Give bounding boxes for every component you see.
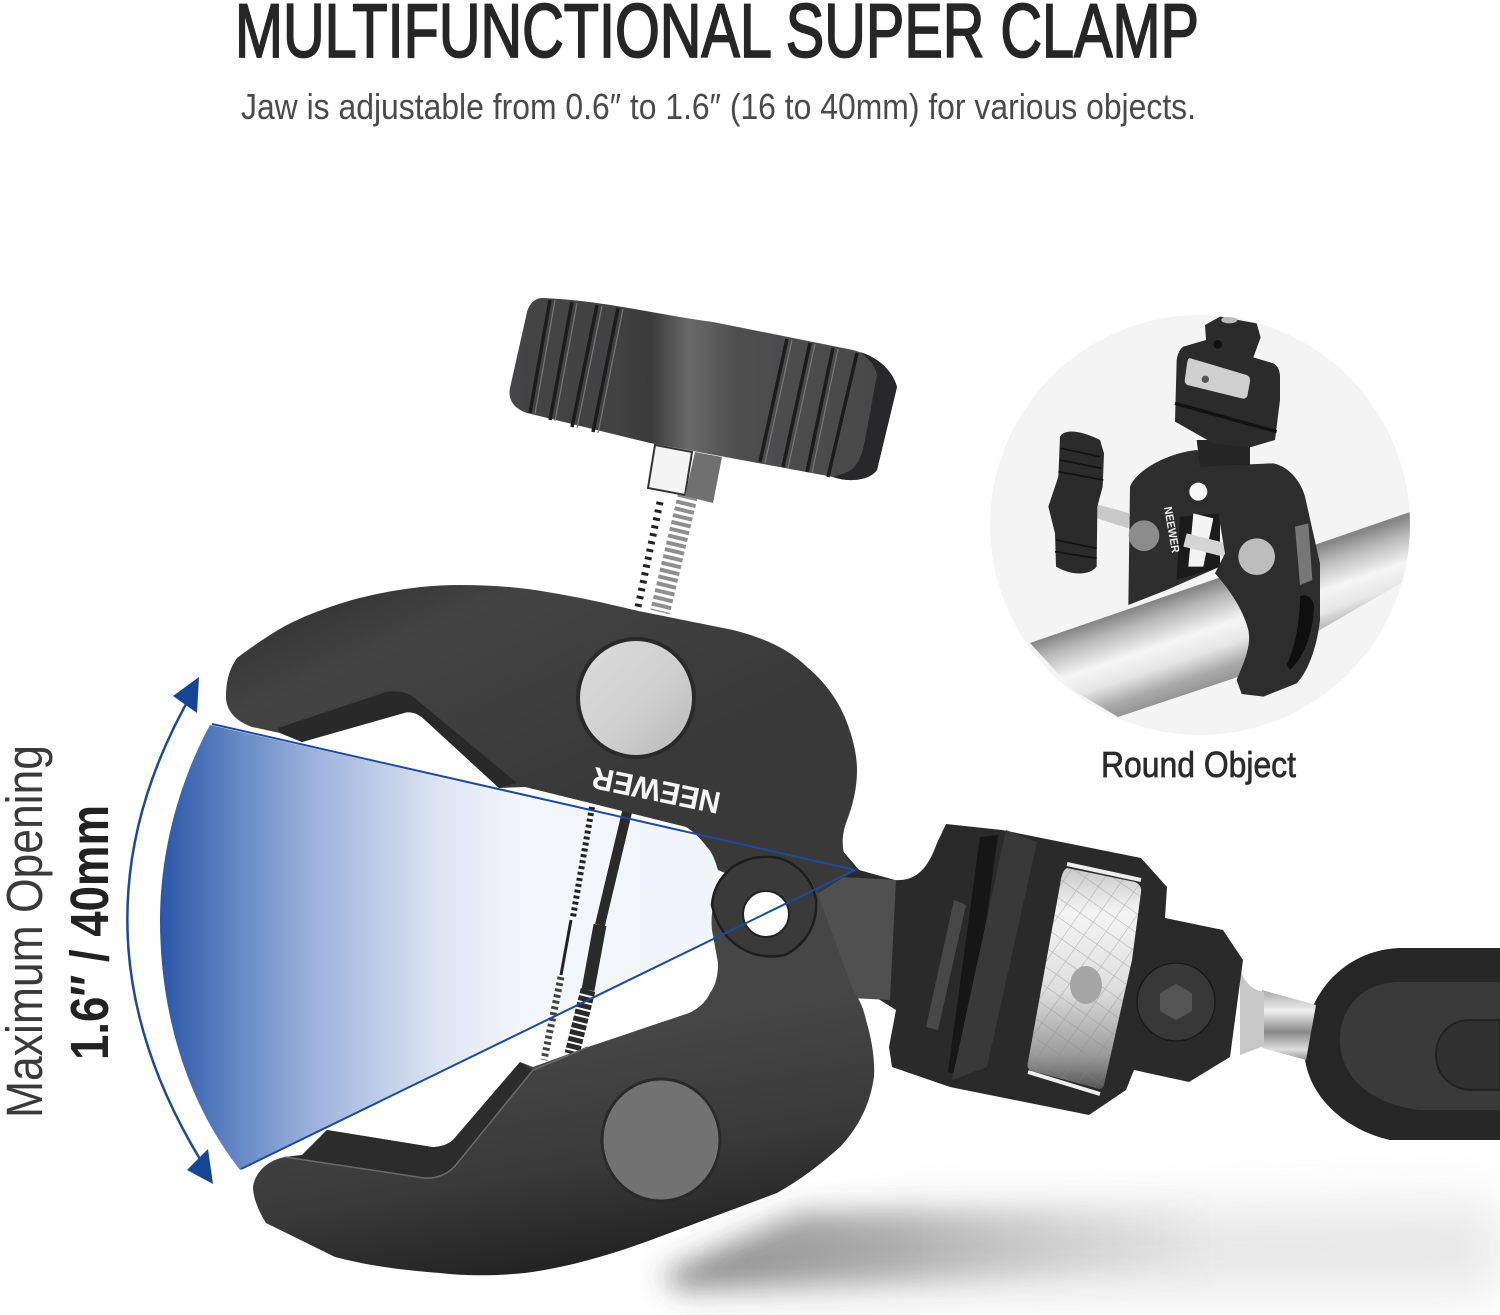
metal shaft <box>1262 990 1316 1060</box>
lower jaw pad <box>285 1062 533 1177</box>
inset background circle <box>990 315 1410 735</box>
collar <box>648 445 692 495</box>
screw inside opening <box>544 807 627 1060</box>
arm body <box>1304 948 1500 1140</box>
pivot ring <box>712 857 816 957</box>
brand logo: NEEWER <box>589 760 723 820</box>
inset clamp on tube: NEEWER <box>1161 506 1181 554</box>
wedge edge lines <box>212 724 855 1169</box>
clamp jaws <box>226 585 874 1275</box>
opening angle wedge fill <box>160 725 720 1170</box>
double arrow arc <box>127 677 213 1184</box>
ball arm <box>1240 948 1500 1140</box>
knurled ring <box>1028 864 1141 1094</box>
inset panel: round object <box>990 315 1410 735</box>
inset clamp on tube <box>1030 317 1410 717</box>
knob ridges <box>530 300 857 477</box>
clamp mount block <box>805 824 1243 1115</box>
lower jaw <box>253 857 874 1275</box>
thumb screw <box>510 298 897 612</box>
pivot hole <box>743 891 789 937</box>
knob <box>510 298 897 480</box>
upper screw head <box>578 639 694 757</box>
hex bolt <box>1137 963 1215 1041</box>
lower screw head <box>602 1079 720 1201</box>
ground shadow <box>660 1205 1500 1290</box>
inset caption: Round Object <box>1101 744 1296 785</box>
mount neck highlight <box>805 875 896 1000</box>
upper jaw pad <box>278 691 517 788</box>
upper jaw <box>226 585 857 905</box>
subtitle: Jaw is adjustable from 0.6″ to 1.6″ (16 to 40mm) for various objects. <box>241 86 1196 127</box>
threaded rod <box>660 495 688 612</box>
vertical value: 1.6 in / 40mm: 1.6″ / 40mm <box>60 805 120 1060</box>
